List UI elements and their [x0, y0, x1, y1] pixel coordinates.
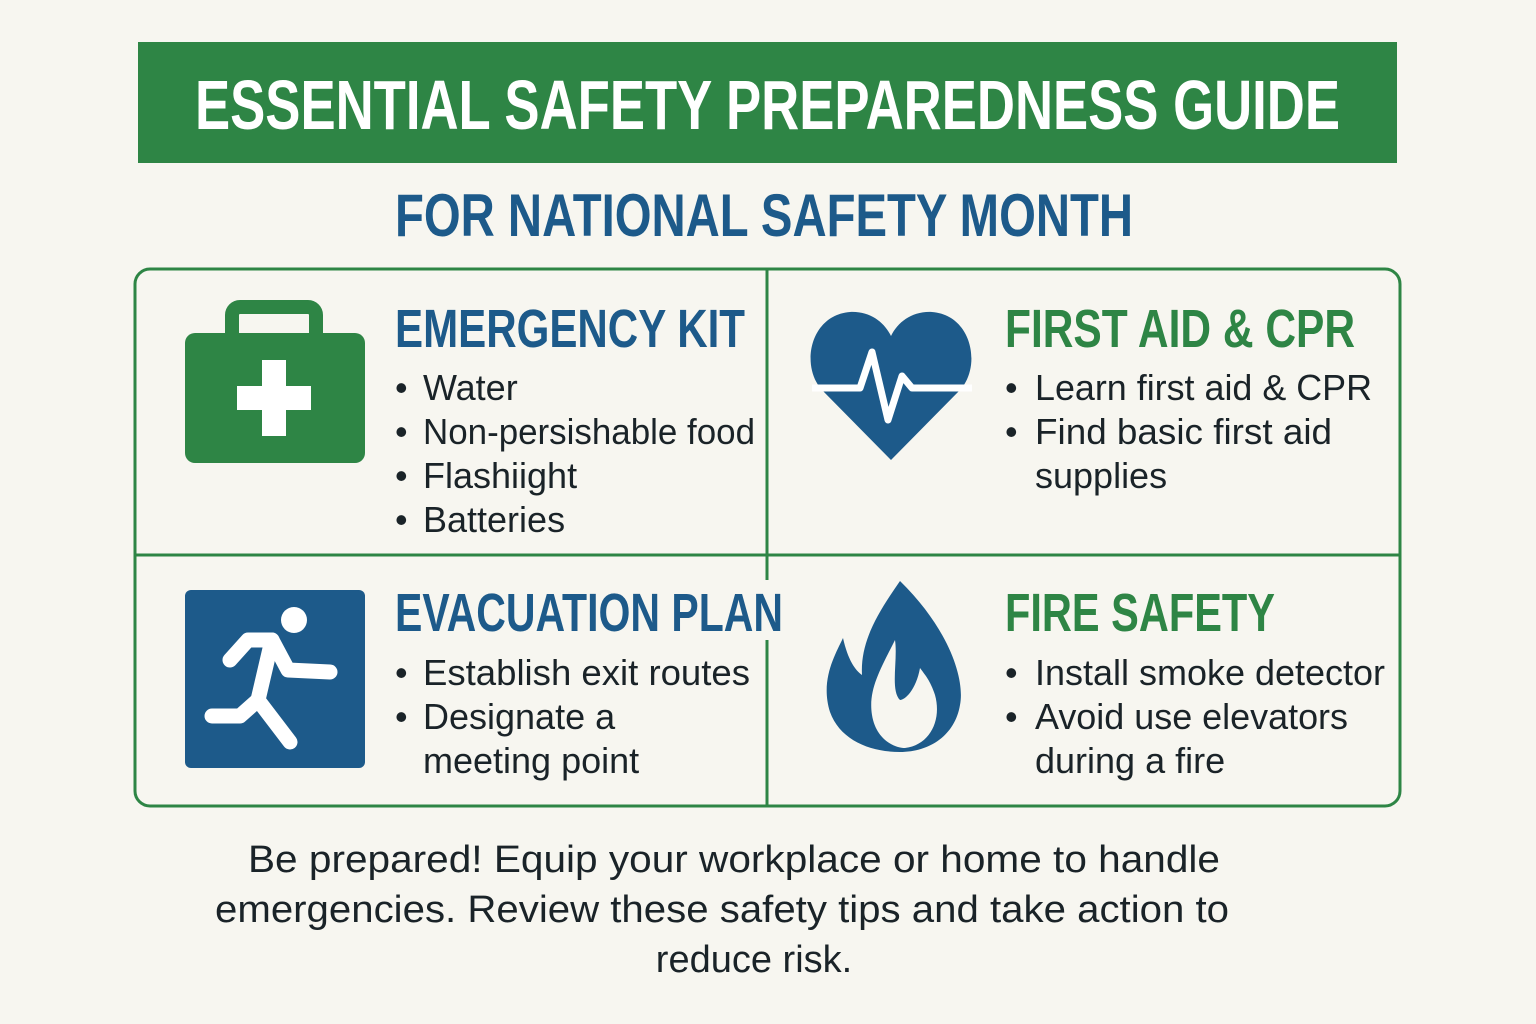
list: fire items	[1005, 652, 1385, 781]
list: first aid items: •	[1005, 411, 1018, 452]
panel grid	[135, 269, 1400, 806]
panel: first aid	[811, 299, 1372, 496]
list: kit items	[395, 367, 755, 540]
list: evacuation items: Designate a	[423, 696, 616, 737]
list: kit items: •	[395, 367, 408, 408]
footer text: reduce risk.	[656, 939, 852, 981]
list: first aid items	[1005, 367, 1372, 496]
list: kit items: Non-persishable food	[423, 411, 755, 452]
list: first aid items: •	[1005, 367, 1018, 408]
heading: first aid & cpr: FIRST AID & CPR	[1005, 299, 1355, 359]
list: kit items: Batteries	[423, 499, 565, 540]
list: kit items: Flashiight	[423, 455, 577, 496]
footer text: emergencies. Review these safety tips and take action to	[215, 889, 1229, 931]
icon: heart	[811, 312, 972, 460]
list: evacuation items: •	[395, 696, 408, 737]
panel: emergency kit	[185, 299, 755, 540]
list: fire items: •	[1005, 652, 1018, 693]
list: evacuation items: Establish exit routes	[423, 652, 750, 693]
list: first aid items: Learn first aid & CPR	[1035, 367, 1372, 408]
panel: evacuation plan	[185, 583, 783, 781]
icon: flame	[827, 581, 961, 752]
list: fire items: during a fire	[1035, 740, 1225, 781]
list: fire items: Install smoke detector	[1035, 652, 1385, 693]
footer text	[215, 839, 1229, 981]
list: kit items: •	[395, 411, 408, 452]
heading: emergency kit: EMERGENCY KIT	[395, 299, 745, 359]
list: fire items: •	[1005, 696, 1018, 737]
subtitle: FOR NATIONAL SAFETY MONTH	[395, 182, 1133, 249]
heading: evacuation plan: EVACUATION PLAN	[395, 583, 783, 643]
list: first aid items: Find basic first aid	[1035, 411, 1332, 452]
footer text: Be prepared! Equip your workplace or home to handle	[248, 839, 1220, 881]
list: kit items: •	[395, 455, 408, 496]
list: evacuation items	[395, 652, 750, 781]
icon: first aid kit	[185, 307, 365, 463]
list: kit items: •	[395, 499, 408, 540]
list: evacuation items: meeting point	[423, 740, 639, 781]
heading: fire safety: FIRE SAFETY	[1005, 583, 1275, 643]
list: kit items: Water	[423, 367, 518, 408]
title banner	[138, 42, 1397, 163]
icon: running person	[185, 590, 365, 768]
list: first aid items: supplies	[1035, 455, 1167, 496]
panel: fire safety	[827, 581, 1385, 781]
list: fire items: Avoid use elevators	[1035, 696, 1348, 737]
list: evacuation items: •	[395, 652, 408, 693]
